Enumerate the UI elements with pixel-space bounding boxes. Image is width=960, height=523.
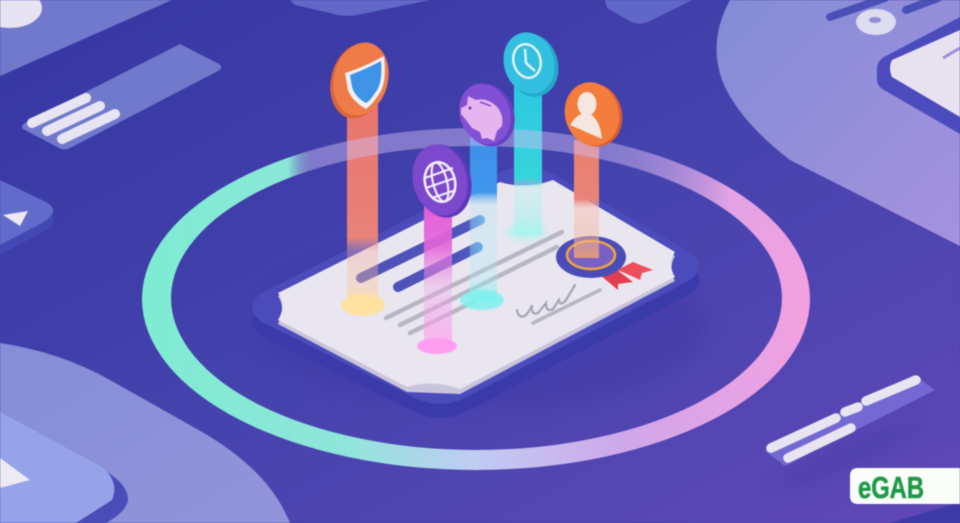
- logo text: eGAB: [858, 470, 924, 505]
- icon: white arrow: [0, 458, 30, 488]
- list lines: [32, 98, 115, 139]
- panel: top centre button: [290, 0, 430, 16]
- icon: person coin: [558, 76, 629, 153]
- beam: teal: [514, 85, 542, 235]
- panel: bottom right bar: [765, 375, 935, 501]
- beam: blue: [470, 130, 497, 302]
- certificate tray: [252, 167, 700, 418]
- glow: upper cyan base: [505, 224, 545, 240]
- icon: globe coin: [405, 138, 479, 224]
- icon: shield coin: [323, 37, 396, 124]
- icon: triangle: [3, 211, 28, 226]
- signature: [517, 285, 575, 317]
- beam: magenta: [424, 205, 452, 345]
- ring: lower and side arcs: [142, 128, 810, 470]
- beam: right salmon: [574, 140, 599, 258]
- mini certificate: [877, 17, 960, 134]
- panel: top left list bar: [22, 44, 221, 150]
- icon: clock coin: [496, 26, 566, 103]
- panel: top right small button: [605, 0, 692, 24]
- seal ribbons: [600, 262, 653, 290]
- glow: pink base: [417, 338, 457, 354]
- pills: [771, 380, 916, 458]
- panel: bottom left backdrop: [0, 343, 290, 523]
- dark strip under badge: [890, 502, 960, 523]
- certificate paper: [278, 180, 675, 394]
- glow: yellow base: [341, 294, 385, 316]
- signature line: [533, 290, 600, 323]
- certificate text bars: [361, 220, 600, 333]
- mini card: [0, 412, 128, 523]
- grey text lines: [386, 232, 562, 333]
- panel: top right backdrop: [717, 0, 960, 246]
- logo badge: eGAB: [850, 468, 960, 505]
- tray shadow: [255, 240, 705, 410]
- pills and disc: [830, 0, 938, 17]
- panel: top left backdrop: [0, 0, 172, 76]
- panel: left arrow button: [0, 180, 53, 255]
- icon: top left disc: [0, 0, 42, 28]
- seal: [556, 236, 626, 278]
- ring: translucent top arc: [294, 128, 686, 186]
- icon: piggy coin: [451, 76, 523, 154]
- glow: cyan base: [460, 290, 504, 310]
- beam: left salmon: [347, 105, 378, 305]
